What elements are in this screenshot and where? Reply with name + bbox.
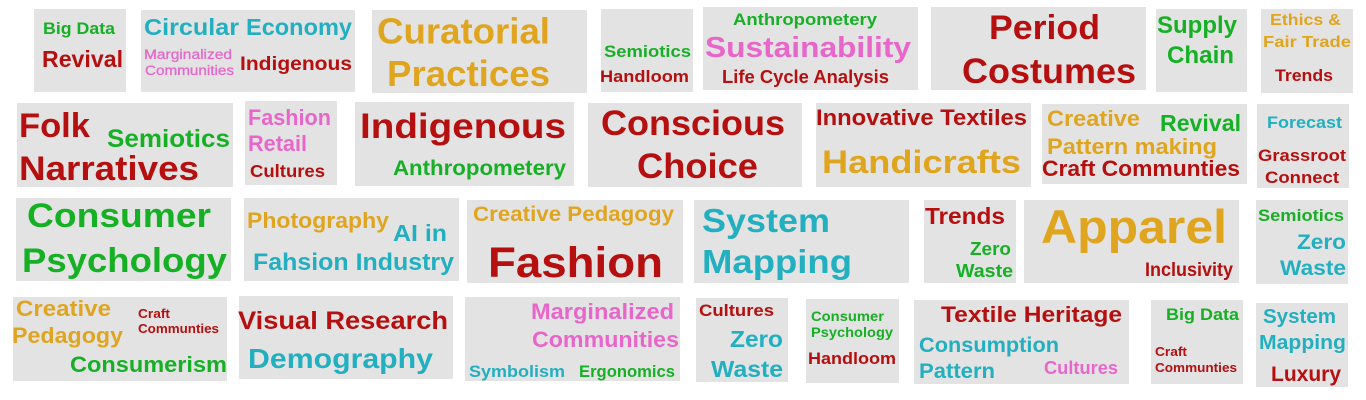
label: Craft Communties: Craft Communties xyxy=(1042,156,1240,181)
panel: Big Data, Craft Communties xyxy=(1151,300,1243,384)
label: Marginalized: Marginalized xyxy=(531,299,674,324)
label: Revival: Revival xyxy=(1160,110,1241,136)
panel: Grassroot Connect xyxy=(1257,104,1349,188)
panel: Conscious Choice xyxy=(588,103,802,187)
label: Consumerism: Consumerism xyxy=(70,352,227,377)
label: Fashion: Fashion xyxy=(248,105,331,130)
label: Photography: Photography xyxy=(247,208,390,233)
label: Demography: Demography xyxy=(248,343,433,374)
label: Cultures: Cultures xyxy=(699,302,774,320)
label: Big Data: Big Data xyxy=(43,20,116,38)
label: Symbolism: Symbolism xyxy=(469,362,565,381)
panel: Curatorial Practices xyxy=(372,10,587,94)
label: Ethics &: Ethics & xyxy=(1270,12,1341,29)
label: Textile Heritage: Textile Heritage xyxy=(941,302,1122,327)
label: Indigenous: Indigenous xyxy=(360,107,566,146)
label: Retail: Retail xyxy=(248,131,307,156)
label: Life Cycle Analysis: Life Cycle Analysis xyxy=(722,67,889,87)
panel: Consumer Psychology xyxy=(16,197,231,281)
label: Trends: Trends xyxy=(925,203,1005,229)
label: Cultures: Cultures xyxy=(1044,358,1118,378)
panel: Semiotics, Zero Waste xyxy=(1256,200,1348,284)
label: Waste: Waste xyxy=(1280,257,1346,280)
label: Fashion: Fashion xyxy=(488,239,663,287)
label: Consumer: Consumer xyxy=(811,308,885,324)
label: Handicrafts: Handicrafts xyxy=(822,144,1021,180)
label: Grassroot: Grassroot xyxy=(1258,147,1347,165)
label: Consumer: Consumer xyxy=(27,197,211,235)
label: Pattern making: Pattern making xyxy=(1047,134,1217,159)
label: Big Data: Big Data xyxy=(1166,305,1240,324)
label: Communities: Communities xyxy=(532,327,679,352)
label: Fair Trade: Fair Trade xyxy=(1263,34,1351,51)
panel: Fashion Retail xyxy=(245,101,337,185)
label: Waste: Waste xyxy=(956,261,1013,281)
label: Revival: Revival xyxy=(42,46,123,72)
panel: System Mapping, Luxury xyxy=(1256,303,1348,387)
label: Mapping: Mapping xyxy=(1259,332,1346,354)
label: Luxury: Luxury xyxy=(1271,363,1341,386)
panel: Visual Research, Demography xyxy=(238,296,453,379)
panel: Marginalized Communities xyxy=(465,297,680,381)
panel: AI in Fashion Industry xyxy=(244,198,459,281)
label: Pedagogy: Pedagogy xyxy=(12,323,124,348)
label: Mapping: Mapping xyxy=(702,243,852,280)
label: Sustainability: Sustainability xyxy=(705,32,911,64)
panel: Consumer Psychology, Handloom xyxy=(806,299,899,383)
panel: Indigenous xyxy=(355,102,574,186)
label: Semiotics: Semiotics xyxy=(107,125,230,153)
panel: Apparel xyxy=(1024,200,1239,283)
label: Zero: Zero xyxy=(730,326,783,352)
label: Indigenous: Indigenous xyxy=(240,54,352,75)
label: Handloom: Handloom xyxy=(600,67,689,86)
panel: Semiotics, Handloom xyxy=(600,9,693,92)
panel: Folk Narratives xyxy=(17,103,233,188)
label: Cultures: Cultures xyxy=(250,161,325,181)
label: Communties: Communties xyxy=(1155,361,1237,375)
label: Pattern: Pattern xyxy=(919,359,995,383)
label: Waste: Waste xyxy=(711,356,783,382)
label: Circular: Circular xyxy=(144,14,239,40)
label: Marginalized: Marginalized xyxy=(144,47,232,62)
panel: Ethics & Fair Trade xyxy=(1261,9,1353,93)
label: Creative: Creative xyxy=(16,296,111,321)
label: AI in: AI in xyxy=(393,220,447,246)
label: Craft: Craft xyxy=(138,306,171,321)
label: Supply: Supply xyxy=(1157,12,1238,39)
label: Forecast: Forecast xyxy=(1267,113,1342,132)
label: Ergonomics: Ergonomics xyxy=(579,363,675,381)
label: Consumption: Consumption xyxy=(919,333,1059,357)
panel: Sustainability xyxy=(703,7,918,90)
panel: Period Costumes xyxy=(931,7,1146,91)
label: Curatorial: Curatorial xyxy=(377,10,550,52)
panel: Textile Heritage xyxy=(914,300,1129,384)
label: Costumes: Costumes xyxy=(962,52,1136,91)
label: Narratives: Narratives xyxy=(19,150,199,188)
label: Psychology: Psychology xyxy=(22,242,227,280)
panel: Fashion xyxy=(467,200,683,287)
label: Zero: Zero xyxy=(1297,231,1346,254)
label: Innovative Textiles: Innovative Textiles xyxy=(816,105,1027,130)
label: Craft: Craft xyxy=(1155,345,1188,359)
label: Creative Pedagogy: Creative Pedagogy xyxy=(473,203,674,226)
panel: Big Data, Revival xyxy=(34,9,126,92)
panel: Supply Chain xyxy=(1156,9,1247,92)
panel: Handicrafts xyxy=(816,103,1031,187)
label: Fahsion Industry: Fahsion Industry xyxy=(253,249,455,276)
panel: System Mapping xyxy=(694,200,909,283)
label: Connect: Connect xyxy=(1265,169,1340,187)
label: Conscious: Conscious xyxy=(601,104,785,143)
label: Visual Research: Visual Research xyxy=(238,307,448,335)
label: Economy: Economy xyxy=(246,14,352,40)
label: Inclusivity: Inclusivity xyxy=(1145,260,1233,281)
panel: Creative Pedagogy xyxy=(12,296,227,381)
label: Apparel: Apparel xyxy=(1041,200,1227,253)
label: Handloom: Handloom xyxy=(808,349,896,368)
label: System: System xyxy=(1263,306,1336,328)
label: Period: Period xyxy=(989,9,1100,47)
label: Chain: Chain xyxy=(1167,42,1234,69)
label: Folk: Folk xyxy=(19,107,90,145)
label: Semiotics: Semiotics xyxy=(604,42,691,61)
label: Zero: Zero xyxy=(970,239,1011,259)
panel: Cultures, Zero Waste xyxy=(696,298,788,382)
label: Practices: Practices xyxy=(387,53,550,94)
label: Psychology: Psychology xyxy=(811,324,893,340)
panel: Trends, Zero Waste xyxy=(924,200,1016,283)
label: Anthropometery: Anthropometery xyxy=(393,157,566,180)
label: Semiotics: Semiotics xyxy=(1258,207,1344,225)
label: Choice: Choice xyxy=(637,147,758,186)
label: Creative: Creative xyxy=(1047,106,1140,131)
label: Communties: Communties xyxy=(138,321,219,336)
label: Anthropometery: Anthropometery xyxy=(733,10,878,29)
label: Trends: Trends xyxy=(1275,66,1333,85)
label: System: System xyxy=(702,202,830,239)
label: Communities: Communities xyxy=(145,63,234,78)
panel: Pattern making xyxy=(1042,104,1247,184)
panel: Circular Economy xyxy=(141,10,355,92)
